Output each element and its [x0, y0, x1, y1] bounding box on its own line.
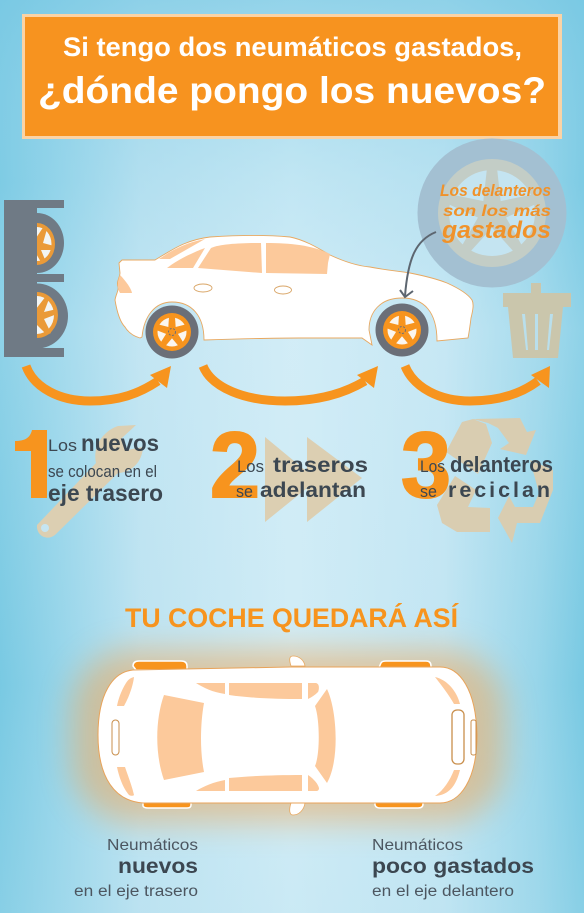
icon: wrench: [37, 425, 143, 538]
upper stacked tire: [10, 213, 64, 273]
step 3: [401, 413, 553, 517]
car body: [115, 236, 473, 345]
step 2 text: adelantan: [260, 478, 366, 502]
step 1 text: se colocan en el: [48, 462, 157, 481]
callout: front tires most worn: [440, 181, 551, 244]
roof accent: [159, 239, 205, 259]
section heading: TU COCHE QUEDARÁ ASÍ: [125, 602, 459, 633]
upper left band: [446, 419, 492, 474]
step 3 text: [420, 452, 553, 502]
orange glow: [72, 650, 504, 822]
step 1: [15, 430, 163, 506]
arrow 1: [26, 366, 171, 401]
side windows top: [196, 683, 319, 699]
step 1 text: Los: [48, 436, 77, 455]
rear tires and front tires: [133, 661, 431, 808]
car side view: [115, 236, 473, 358]
middle window: [198, 243, 262, 273]
caption: rear axle: en el eje trasero: [74, 883, 198, 900]
rear window: [157, 695, 204, 780]
side mirrors: [290, 656, 305, 815]
callout: front tires most worn: son los más: [443, 203, 551, 220]
caption: front axle: poco gastados: [372, 855, 534, 878]
door handles: [194, 284, 292, 294]
bottom left band: [437, 476, 490, 532]
caption: rear axle: Neumáticos: [107, 837, 198, 854]
rear side window: [167, 248, 205, 268]
right arrow: [498, 460, 553, 543]
icon: tire stack: [4, 200, 68, 357]
front wheel: [376, 304, 428, 356]
number 2: 2: [210, 413, 260, 517]
step 1 text: eje trasero: [48, 480, 163, 506]
front window: [266, 243, 330, 274]
caption: front axle: en el eje delantero: [372, 883, 514, 900]
number 3: 3: [401, 413, 451, 517]
icon: worn tire: [418, 138, 566, 288]
step 2 text: traseros: [273, 453, 368, 477]
step 1 text: nuevos: [81, 430, 159, 456]
lower stacked tire: [6, 284, 68, 348]
step 3 text: Los: [420, 457, 445, 476]
arrow 3: [405, 366, 550, 401]
step 3 text: reciclan: [448, 478, 550, 502]
caption: rear axle: nuevos: [118, 855, 198, 878]
front and rear lights: [117, 677, 460, 796]
icon: recycle arrows: [437, 418, 553, 543]
step 2 text: [236, 453, 368, 502]
top arrow: [473, 418, 536, 455]
plates and bumper: [112, 710, 476, 764]
step 3 text: delanteros: [450, 452, 553, 477]
title banner: [22, 14, 562, 139]
windshield: [315, 689, 336, 783]
side windows bottom: [196, 775, 319, 791]
step 2 text: se: [236, 482, 253, 501]
caption: front axle: [372, 837, 534, 900]
step 2 text: Los: [237, 457, 264, 476]
step 2: [210, 413, 368, 517]
caption: front axle: Neumáticos: [372, 837, 463, 854]
title line 2: ¿dónde pongo los nuevos?: [38, 70, 546, 111]
callout: front tires most worn: gastados: [441, 217, 551, 244]
rear wheel: [146, 306, 198, 358]
icon: fast-forward triangles: [265, 437, 362, 522]
arrow: callout to front wheel: [400, 232, 436, 297]
step 3 text: se: [420, 482, 437, 501]
callout: front tires most worn: Los delanteros: [440, 181, 551, 200]
title line 1: Si tengo dos neumáticos gastados,: [63, 32, 522, 62]
arrow 2: [203, 366, 378, 401]
caption: rear axle: [74, 837, 198, 900]
car top view: [72, 650, 504, 822]
car body: [98, 667, 477, 803]
icon: trash can: [503, 283, 571, 358]
tail light: [118, 275, 132, 293]
number 1: [15, 430, 47, 498]
step 1 text: [48, 430, 163, 506]
